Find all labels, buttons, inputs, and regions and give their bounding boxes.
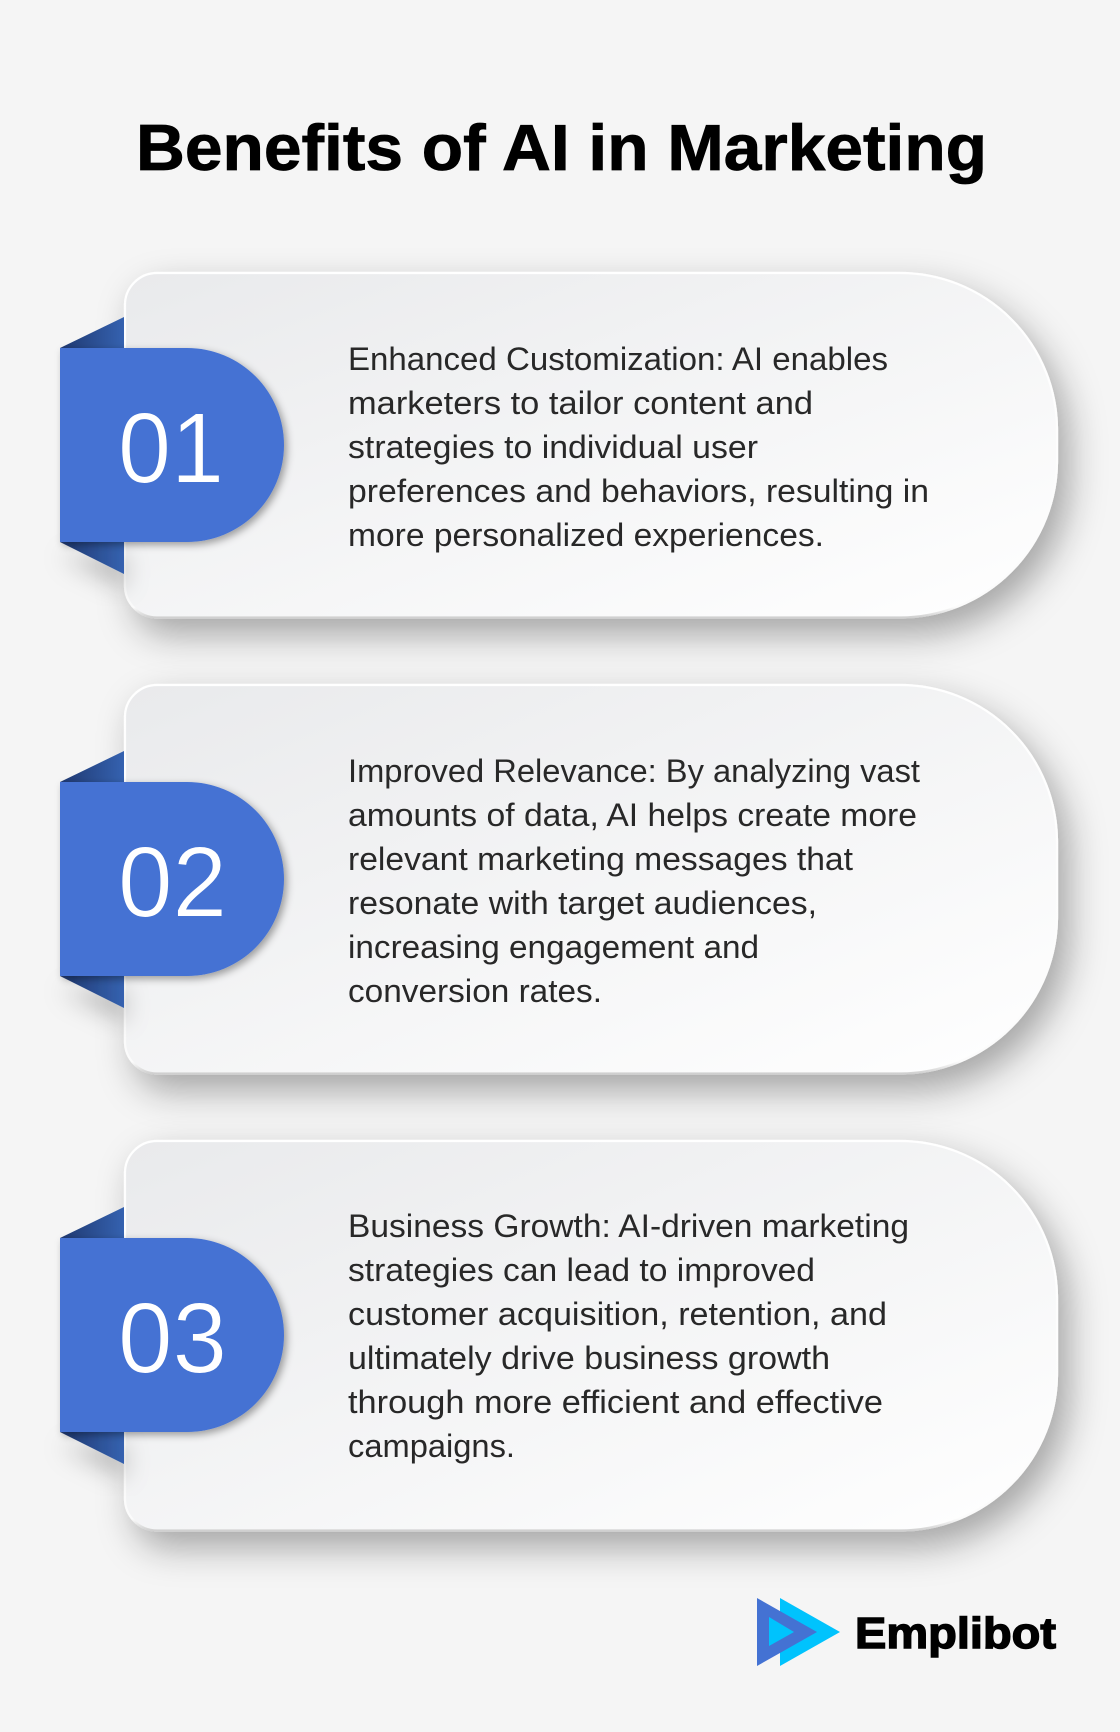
card 2 ribbon fold top (60, 751, 124, 782)
card 2 ribbon fold bottom (60, 976, 124, 1008)
card 1 number badge: 01 (118, 392, 224, 504)
card 3 number badge: 03 (118, 1282, 227, 1394)
card 2 background (125, 685, 1057, 1074)
card 2 text: conversion rates. (348, 973, 602, 1009)
card 3 background (125, 1141, 1057, 1530)
card 3 text: strategies can lead to improved (348, 1252, 815, 1288)
card 1 ribbon fold top (60, 317, 124, 348)
card 3 text: ultimately drive business growth (348, 1340, 830, 1376)
card 1 background (125, 273, 1057, 618)
card 1 ribbon fold bottom (60, 542, 124, 574)
panel: card 3 (60, 1141, 1057, 1530)
card 1 text: strategies to individual user (348, 429, 758, 465)
icon: play triangles (757, 1598, 840, 1666)
card 2 text: relevant marketing messages that (348, 841, 853, 877)
card 1 text: marketers to tailor content and (348, 385, 813, 421)
card 3 text (348, 1208, 909, 1464)
card 1 text: Enhanced Customization: AI enables (348, 341, 888, 377)
card 1 text: more personalized experiences. (348, 517, 824, 553)
card 1 number badge (60, 348, 284, 542)
panel: card 1 (60, 273, 1057, 618)
card 3 number badge (60, 1238, 284, 1432)
card 2 text: Improved Relevance: By analyzing vast (348, 753, 920, 789)
card 3 text: Business Growth: AI-driven marketing (348, 1208, 909, 1244)
card 3 text: customer acquisition, retention, and (348, 1296, 887, 1332)
card 3 text: campaigns. (348, 1428, 515, 1464)
title: Benefits of AI in Marketing (136, 112, 987, 184)
panel: card 2 (60, 685, 1057, 1074)
card 2 text (348, 753, 920, 1009)
card 1 text: preferences and behaviors, resulting in (348, 473, 929, 509)
card 1 text (348, 341, 929, 553)
logo wordmark: Emplibot (855, 1609, 1056, 1658)
card 2 text: increasing engagement and (348, 929, 759, 965)
logo: Emplibot (757, 1598, 1056, 1666)
card 3 ribbon fold bottom (60, 1432, 124, 1464)
card 2 number badge: 02 (118, 826, 227, 938)
card 2 text: amounts of data, AI helps create more (348, 797, 917, 833)
card 3 ribbon fold top (60, 1207, 124, 1238)
card 2 number badge (60, 782, 284, 976)
card 2 text: resonate with target audiences, (348, 885, 817, 921)
card 3 text: through more efficient and effective (348, 1384, 883, 1420)
